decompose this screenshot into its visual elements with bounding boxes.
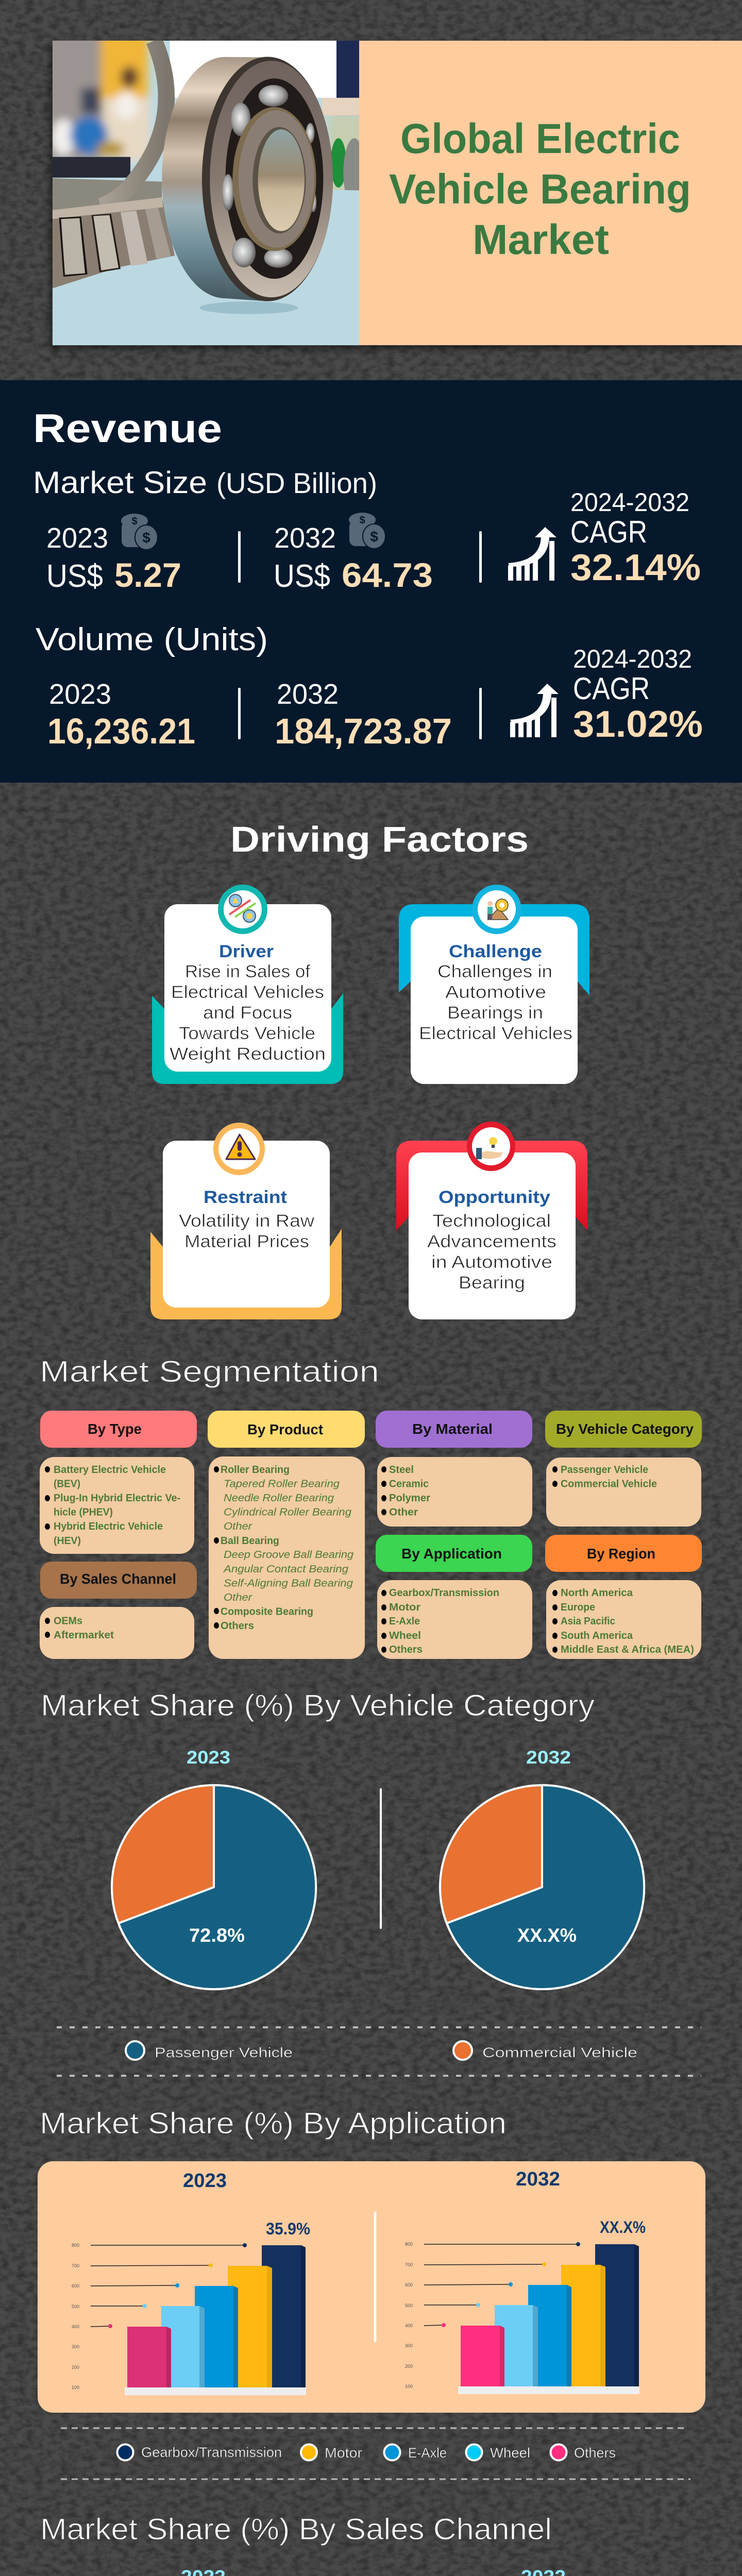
bar chart: 2032: 500 (405, 2303, 413, 2308)
market size 2023: US$ (46, 558, 103, 594)
divider (238, 688, 241, 739)
product list: Roller Bearing (221, 1464, 290, 1476)
icon: growth chart (510, 684, 559, 737)
panel: challenge (399, 885, 589, 1084)
bar chart: 2032: 400 (405, 2323, 413, 2328)
icon: opportunity (467, 1122, 515, 1171)
revenue CAGR: 2024-2032 (570, 488, 689, 517)
sales list (45, 1616, 114, 1641)
icon: coins: $ (131, 516, 138, 527)
hero title panel: Vehicle Bearing (389, 166, 691, 213)
heading: share by vehicle category: Market Share (%) By Vehicle Category (41, 1689, 595, 1722)
bar chart: 2032: 300 (405, 2343, 413, 2348)
type list: (HEV) (54, 1535, 81, 1547)
legend: vehicle category: Passenger Vehicle (155, 2045, 293, 2060)
panel: driver (152, 885, 343, 1084)
pie chart: vehicle category 2023: 2023 (187, 1748, 230, 1768)
revenue CAGR (570, 488, 701, 588)
opportunity text: Bearing (459, 1273, 525, 1293)
challenge text: Electrical Vehicles (419, 1024, 572, 1043)
bar chart: 2023: 35.9% (266, 2219, 310, 2238)
legend: application: Others (574, 2445, 616, 2461)
icon: coins: $ (370, 529, 378, 545)
panel: restraint (150, 1123, 342, 1319)
driver text: Weight Reduction (170, 1044, 326, 1064)
market size 2023 (46, 522, 181, 594)
sales list: Aftermarket (54, 1630, 114, 1641)
divider (238, 531, 241, 583)
product list: Angular Contact Bearing (223, 1564, 348, 1575)
market size 2032 (274, 522, 433, 594)
divider (479, 688, 482, 739)
product list (214, 1464, 353, 1632)
volume 2032 (275, 678, 452, 751)
bar chart: 2023: 800 (72, 2243, 79, 2248)
heading: market segmentation: Market Segmentation (40, 1355, 379, 1388)
type list: (BEV) (54, 1479, 80, 1490)
divider (479, 531, 482, 583)
restraint text: Volatility in Raw (179, 1211, 314, 1231)
panel: revenue: Market Size (33, 465, 207, 500)
revenue CAGR: 32.14% (570, 547, 701, 588)
hero title panel: Global Electric (400, 115, 680, 162)
product list: Deep Groove Ball Bearing (224, 1549, 353, 1561)
type list: hicle (PHEV) (54, 1506, 113, 1518)
panel: revenue: (USD Billion) (216, 467, 377, 499)
driver text: Rise in Sales of (185, 962, 311, 981)
region list: North America (561, 1587, 633, 1599)
panel: driver: Driver (219, 942, 274, 961)
volume 2032: 2032 (277, 678, 339, 710)
product list: Composite Bearing (221, 1606, 313, 1618)
panel: by product (208, 1411, 365, 1659)
panel: challenge: Challenge (449, 942, 542, 961)
hero title panel (359, 41, 742, 345)
bar chart: 2032: 200 (405, 2364, 413, 2369)
legend: application: Wheel (490, 2445, 530, 2461)
type list: Battery Electric Vehicle (54, 1464, 166, 1476)
product list: Others (221, 1620, 254, 1632)
restraint text: Material Prices (184, 1232, 309, 1251)
volume CAGR: 2024-2032 (573, 645, 692, 673)
market size 2032: 64.73 (342, 556, 433, 594)
restraint text (179, 1211, 314, 1251)
opportunity text: in Automotive (431, 1252, 552, 1272)
panel: by sales channel (40, 1562, 197, 1659)
challenge text (419, 962, 572, 1043)
panel: revenue (0, 380, 742, 783)
panel: by vehicle category: By Vehicle Category (556, 1421, 694, 1437)
material list: Polymer (389, 1493, 430, 1504)
application list: Others (389, 1644, 423, 1655)
bar chart: 2023: 700 (72, 2263, 79, 2268)
icon: challenge (472, 885, 521, 934)
bar chart: 2032: 700 (405, 2262, 413, 2267)
product list: Tapered Roller Bearing (224, 1479, 340, 1490)
icon: growth chart (508, 527, 556, 581)
hero title panel: Market (473, 216, 609, 263)
panel: application charts (38, 2161, 705, 2413)
product list: Other (224, 1592, 252, 1603)
product list: Needle Roller Bearing (224, 1493, 334, 1504)
opportunity text: Technological (432, 1211, 551, 1231)
legend: application: Motor (325, 2445, 362, 2461)
panel: by sales channel: By Sales Channel (60, 1571, 176, 1587)
panel: by region: By Region (587, 1546, 655, 1562)
driver text: Electrical Vehicles (171, 982, 324, 1002)
panel: opportunity: Opportunity (439, 1188, 550, 1207)
hero banner (44, 31, 742, 349)
region list: South America (561, 1630, 633, 1641)
legend: vehicle category (126, 2041, 637, 2060)
panel: by material (376, 1411, 532, 1527)
volume 2023 (47, 678, 195, 751)
bar chart: 2023 (72, 2219, 310, 2395)
type list: Hybrid Electric Vehicle (54, 1521, 163, 1532)
opportunity text (427, 1211, 556, 1293)
region list (552, 1587, 694, 1655)
icon: coins (121, 514, 158, 550)
product list: Self-Aligning Ball Bearing (224, 1578, 353, 1589)
opportunity text: Advancements (427, 1232, 556, 1251)
material list: Ceramic (389, 1479, 429, 1490)
material list: Steel (389, 1464, 414, 1476)
legend: application: E-Axle (408, 2445, 447, 2461)
revenue CAGR: CAGR (570, 515, 647, 549)
market size 2032: US$ (274, 558, 330, 594)
application list: Gearbox/Transmission (389, 1587, 499, 1599)
hero photo: bearing (44, 31, 367, 346)
panel: by product: By Product (247, 1421, 323, 1437)
panel: by application: By Application (401, 1546, 502, 1562)
icon: coins (349, 513, 385, 549)
panel: by region (545, 1535, 702, 1659)
driver text (170, 962, 326, 1064)
bar chart: 2023: 500 (72, 2304, 79, 2309)
pie chart: vehicle category 2023 (112, 1748, 316, 1989)
vehicle list: Commercial Vehicle (561, 1479, 657, 1490)
volume 2032: 184,723.87 (275, 711, 452, 751)
bar chart: 2023: 600 (72, 2283, 79, 2289)
volume CAGR: CAGR (573, 671, 650, 706)
bar chart: 2023: 300 (72, 2344, 79, 2349)
pie chart: vehicle category 2032 (440, 1748, 644, 1989)
product list: Other (224, 1521, 252, 1532)
bar chart: 2032: 600 (405, 2282, 413, 2287)
product list: Ball Bearing (221, 1535, 279, 1547)
material list (381, 1464, 430, 1518)
volume 2023: 2023 (49, 678, 111, 710)
market size 2032: 2032 (274, 522, 336, 554)
product list: Cylindrical Roller Bearing (224, 1506, 351, 1518)
bar chart: 2023: 400 (72, 2324, 79, 2329)
bar chart: 2023: 200 (72, 2365, 79, 2370)
material list: Other (389, 1506, 418, 1518)
application list (381, 1587, 499, 1655)
bar chart: 2032: 800 (405, 2242, 413, 2247)
bar chart: 2032 (405, 2218, 646, 2394)
legend: application: Gearbox/Transmission (141, 2445, 282, 2460)
region list: Asia Pacific (561, 1616, 615, 1627)
pie chart: vehicle category 2032: XX.X% (517, 1925, 577, 1946)
challenge text: Challenges in (437, 962, 552, 981)
panel: revenue: Volume (Units) (36, 622, 268, 657)
panel: by application (376, 1535, 532, 1659)
bar chart: 2032: XX.X% (600, 2218, 646, 2236)
sales list: OEMs (54, 1616, 82, 1627)
panel: revenue: Revenue (33, 405, 222, 451)
vehicle list: Passenger Vehicle (561, 1464, 648, 1476)
bar chart: 2032: 100 (405, 2384, 413, 2389)
type list: Plug-In Hybrid Electric Ve- (54, 1493, 180, 1504)
panel: application charts: 2032 (516, 2168, 560, 2190)
legend: application (117, 2444, 616, 2461)
panel: by type: By Type (88, 1421, 142, 1437)
type list (45, 1464, 180, 1547)
panel: opportunity (396, 1122, 587, 1319)
market size 2023: 2023 (46, 522, 108, 554)
application list: Wheel (389, 1630, 421, 1641)
challenge text: Automotive (445, 982, 546, 1002)
pie chart: vehicle category 2032: 2032 (526, 1748, 571, 1768)
region list: Middle East & Africa (MEA) (561, 1644, 694, 1655)
icon: coins: $ (359, 515, 365, 526)
heading: driving factors: Driving Factors (230, 819, 529, 859)
heading: share by sales channel: Market Share (%) By Sales Channel (40, 2513, 552, 2546)
panel: by material: By Material (412, 1421, 493, 1437)
application list: Motor (389, 1602, 420, 1613)
bar chart: 2023: 100 (72, 2385, 79, 2390)
driver text: and Focus (203, 1003, 292, 1023)
driver text: Towards Vehicle (179, 1024, 315, 1043)
panel: by type (40, 1411, 197, 1554)
panel: by vehicle category (545, 1411, 702, 1527)
application list: E-Axle (389, 1616, 420, 1627)
vehicle list (552, 1464, 657, 1490)
icon: coins: $ (142, 530, 150, 546)
main bearing (162, 57, 333, 301)
volume 2023: 16,236.21 (47, 711, 195, 751)
panel: restraint: Restraint (204, 1188, 287, 1207)
pie chart: vehicle category 2023: 72.8% (189, 1925, 245, 1946)
challenge text: Bearings in (447, 1003, 543, 1023)
icon: restraint (213, 1123, 265, 1175)
market size 2023: 5.27 (114, 556, 181, 594)
icon: driver (218, 885, 267, 934)
panel: application charts: 2023 (183, 2170, 227, 2192)
volume CAGR (573, 645, 703, 745)
volume CAGR: 31.02% (573, 704, 703, 745)
region list: Europe (561, 1602, 595, 1613)
heading: share by application: Market Share (%) By Application (40, 2107, 507, 2140)
legend: vehicle category: Commercial Vehicle (482, 2045, 637, 2060)
